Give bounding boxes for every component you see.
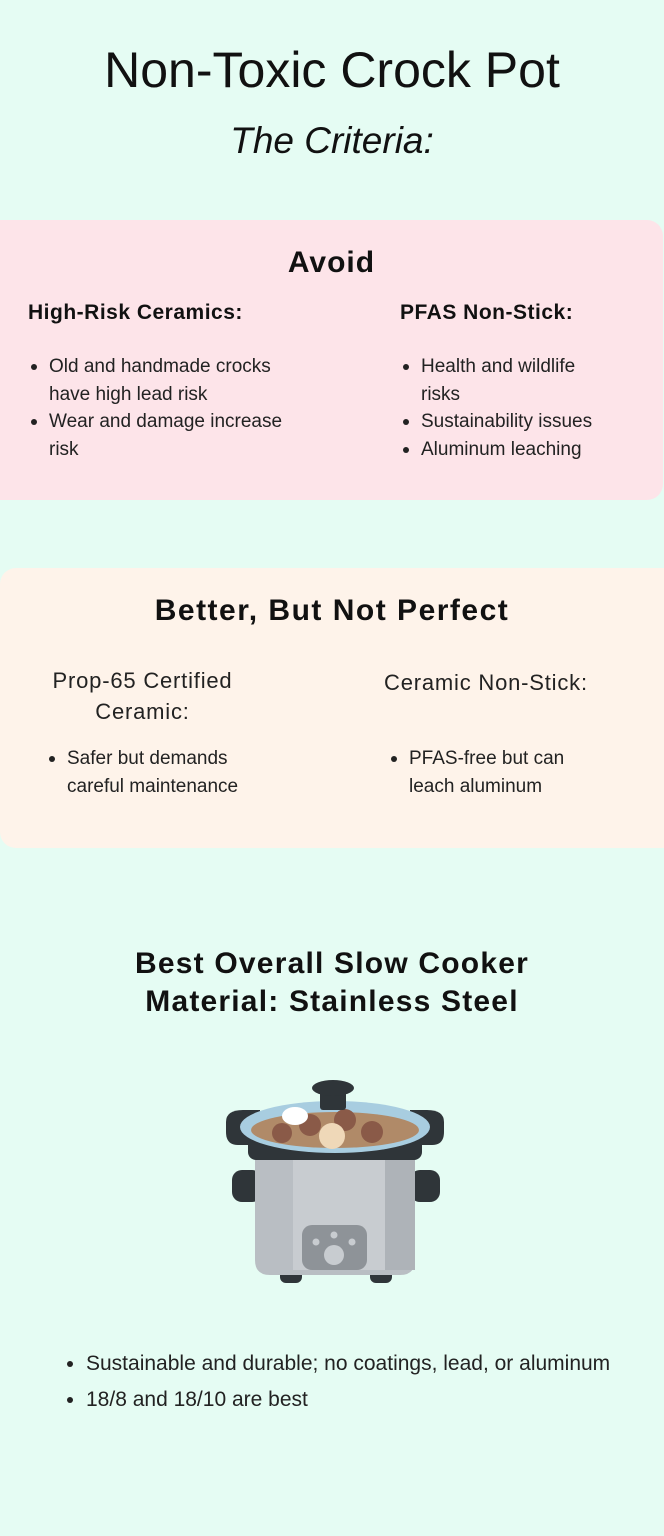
list: ceramics risks [31, 356, 282, 460]
list: stainless steel benefits: Sustainable and durable; no coatings, lead, or aluminum [86, 1352, 610, 1375]
heading: best overall [135, 947, 529, 1018]
subtitle: The Criteria: [230, 120, 434, 161]
subheading: high-risk ceramics: High-Risk Ceramics: [28, 301, 243, 324]
list: stainless steel benefits: 18/8 and 18/10 are best [86, 1388, 308, 1411]
heading: best overall: Material: Stainless Steel [145, 985, 519, 1018]
list: prop-65: Safer but demands careful maintenance [67, 748, 238, 796]
title: Non-Toxic Crock Pot [104, 42, 560, 98]
subheading: pfas non-stick: PFAS Non-Stick: [400, 301, 573, 324]
panel: better but not perfect [0, 568, 664, 848]
list: ceramic non-stick: PFAS-free but can leach aluminum [409, 748, 564, 796]
list: pfas risks: Sustainability issues [421, 411, 592, 432]
list: pfas risks: Health and wildlife risks [421, 356, 575, 404]
list: stainless steel benefits [67, 1352, 610, 1411]
heading: better: Better, But Not Perfect [155, 594, 509, 627]
list: pfas risks: Aluminum leaching [421, 438, 582, 460]
list: pfas risks [403, 356, 592, 460]
panel: avoid [0, 220, 663, 500]
list: ceramics risks: Old and handmade crocks have high lead risk [49, 356, 271, 404]
subheading: ceramic non-stick: Ceramic Non-Stick: [384, 670, 588, 695]
list: ceramics risks: Wear and damage increase risk [49, 411, 282, 460]
heading: best overall: Best Overall Slow Cooker [135, 947, 529, 980]
heading: avoid: Avoid [288, 246, 375, 279]
subheading: prop-65: Prop-65 Certified Ceramic: [53, 668, 232, 724]
icon: slow cooker [226, 1080, 444, 1283]
